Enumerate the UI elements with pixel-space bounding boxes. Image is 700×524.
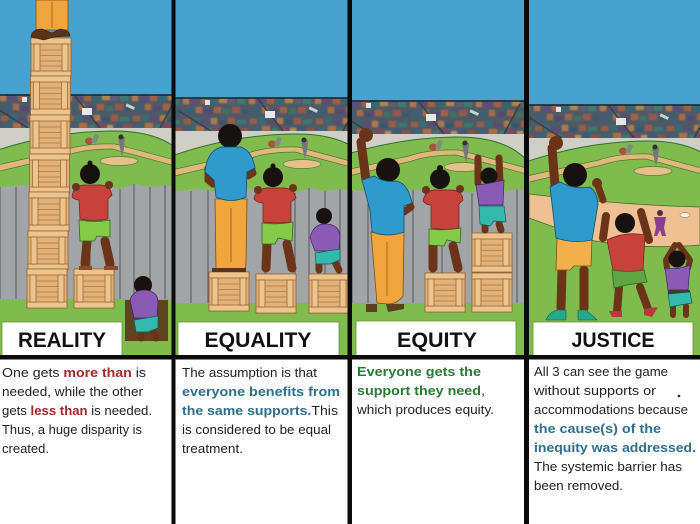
text: justice description: All 3 can see the game [534,364,668,379]
text: reality description: One gets more than is [2,365,147,380]
text: reality description [2,365,152,456]
text: reality description: gets less than is needed. [2,403,152,418]
text: equity description: Everyone gets the [357,364,481,379]
middle child on crate [72,160,118,308]
small child on crate [309,208,349,313]
text: justice description: been removed. [534,478,623,493]
wooden fence [175,188,351,303]
text: equality description: is considered to be equal [182,422,331,437]
label box: justice [533,322,693,356]
middle child arms raised [603,212,658,317]
panel: reality scene [0,0,172,355]
text: equity description: support they need , [357,383,485,398]
text: equity description [356,364,494,417]
tall person no crate [359,128,412,312]
crate tower [27,38,71,308]
text: equity description: which produces equity. [356,402,494,417]
stadium background [176,0,348,355]
tall person legs on tower [31,0,70,40]
text: justice description: the cause(s) of the [534,421,661,436]
tall person on crate [205,124,255,311]
text: equality description: everyone benefits from [182,384,340,399]
text: justice description: without supports or [533,383,657,398]
text: reality description: created. [2,441,49,456]
text: justice description: inequity was addressed. [534,440,696,455]
infield dirt [529,194,700,247]
wooden fence [352,188,528,303]
stray dot [678,395,680,397]
text: reality description: Thus, a huge disparity is [2,422,142,437]
text: justice description: The systemic barrier has [534,459,683,474]
label box: reality [2,322,122,356]
panel: justice scene [529,0,700,355]
panel: equality scene [176,0,348,355]
tall person standing on ground [546,136,603,320]
label box: equality: EQUALITY [204,329,312,352]
text: equality description: treatment. [182,441,243,456]
label box: equity: EQUITY [397,329,477,352]
stadium background [0,0,172,355]
text: justice description: accommodations because [534,402,688,417]
text: reality description: needed, while the other [2,384,144,399]
text: equality description [182,365,340,456]
panel: equity scene [352,0,524,355]
wooden fence [0,184,176,299]
text: equality description: the same supports. This [182,403,339,418]
small child on two crates [472,158,512,312]
text: justice description [533,364,696,493]
label box: equality [178,322,339,356]
small child arms raised [665,245,692,315]
base and fielder [654,210,690,236]
text: equality description: The assumption is that [182,365,317,380]
label box: reality: REALITY [18,329,106,352]
stadium background [529,0,700,355]
label box: equity [356,321,516,356]
middle child on crate [422,165,465,312]
label box: justice: JUSTICE [572,329,654,352]
small child in pit [125,276,168,341]
stadium background [352,0,524,355]
middle child on crate [254,164,297,313]
